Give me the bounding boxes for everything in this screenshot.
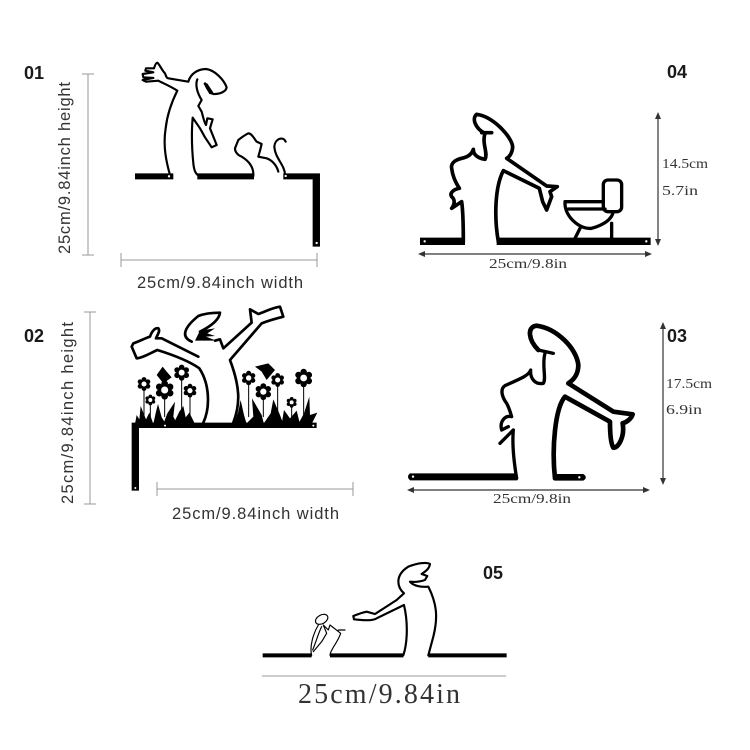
- dimension: 01 height: [56, 74, 94, 255]
- dimension: 03 height: [660, 322, 713, 485]
- dimension: 04 width: [418, 251, 652, 271]
- cat and flower: [311, 612, 345, 655]
- dimension: 04 width: 25cm/9.8in: [489, 256, 567, 271]
- dimension: 04 height: [655, 112, 709, 246]
- label 05: 05: [483, 563, 503, 583]
- person outline: [451, 114, 557, 242]
- person outline: [353, 563, 436, 655]
- wall bracket: [132, 423, 317, 491]
- mouth: [195, 328, 216, 341]
- label 03: 03: [667, 326, 687, 346]
- stems: [144, 377, 304, 417]
- flowers: [138, 363, 312, 408]
- panel: silhouette 02 person in flowers: [132, 307, 317, 491]
- dimension: 01 width: [121, 253, 317, 292]
- mouth: [203, 83, 215, 95]
- mounting holes: [423, 240, 647, 242]
- wall bar: [408, 473, 586, 481]
- label 01: 01: [24, 63, 44, 83]
- dimension: 03 width: [407, 487, 650, 506]
- dimension: 02 height: 25cm/9.84inch height: [59, 322, 77, 504]
- panel: silhouette 04 person and toilet: [420, 114, 651, 245]
- panel: silhouette 05 person and cat: [263, 563, 507, 657]
- label 04: 04: [667, 62, 687, 82]
- person outline: [143, 63, 227, 176]
- mounting holes: [134, 425, 314, 489]
- dimension: 05 width: 25cm/9.84in: [298, 679, 460, 710]
- dimension: 01 height: 25cm/9.84inch height: [56, 82, 74, 254]
- panel: silhouette 01 person and cat: [135, 63, 320, 247]
- person outline: [530, 326, 633, 478]
- dimension: 02 height: [59, 312, 96, 504]
- dimension: 02 width: [157, 482, 353, 523]
- wall bar: [420, 238, 651, 245]
- mounting bracket: [135, 173, 320, 247]
- dimension: 03 height: 17.5cm: [666, 376, 713, 391]
- mounting holes: [412, 475, 580, 478]
- panel: silhouette 03 person: [408, 326, 633, 481]
- dimension: 03 height: 6.9in: [666, 402, 702, 417]
- person outline: [132, 307, 283, 423]
- grass: [135, 397, 317, 424]
- dimension: 02 width: 25cm/9.84inch width: [172, 505, 339, 523]
- dimension: 04 height: 14.5cm: [662, 156, 709, 171]
- mounting holes: [168, 175, 318, 244]
- face and raised arm: [500, 350, 553, 478]
- dimension: 04 height: 5.7in: [662, 183, 698, 198]
- cat outline: [235, 133, 286, 176]
- wall bar: [263, 653, 507, 657]
- dimension: 03 width: 25cm/9.8in: [493, 491, 571, 506]
- dimension: 01 width: 25cm/9.84inch width: [137, 274, 303, 292]
- toilet: [565, 180, 622, 240]
- label 02: 02: [24, 326, 44, 346]
